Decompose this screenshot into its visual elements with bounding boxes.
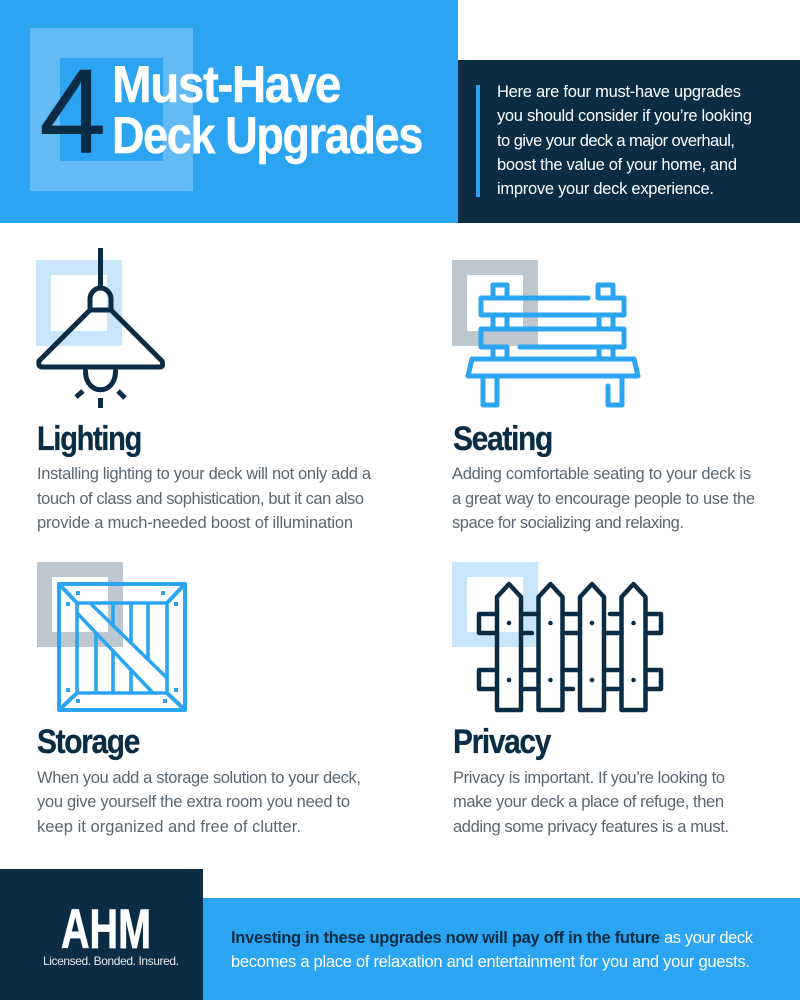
panel: conclusion xyxy=(203,898,800,1000)
intro text: Here are four must-have upgrades xyxy=(497,83,741,101)
conclusion text xyxy=(231,929,754,971)
panel: privacy xyxy=(452,562,729,836)
panel: introduction xyxy=(458,60,800,223)
conclusion text: becomes a place of relaxation and entertainment for you and your guests. xyxy=(231,953,750,971)
intro text: you should consider if you’re looking xyxy=(497,107,752,125)
panel: logo xyxy=(0,869,203,1000)
text: privacy description: Privacy is important. If you’re looking to xyxy=(453,769,725,787)
intro text: to give your deck a major overhaul, xyxy=(497,132,735,150)
panel: storage xyxy=(37,562,361,836)
text: lighting description: provide a much-needed boost of illumination xyxy=(37,514,353,532)
logo tagline: Licensed. Bonded. Insured. xyxy=(43,954,179,968)
text: lighting description xyxy=(37,465,372,532)
title: Deck Upgrades xyxy=(112,107,422,165)
title: Must-Have xyxy=(112,56,341,114)
text: privacy description: adding some privacy features is a must. xyxy=(453,818,729,836)
conclusion text: as your deck xyxy=(664,929,754,947)
heading: privacy: Privacy xyxy=(453,723,551,761)
title xyxy=(112,56,422,165)
text: privacy description xyxy=(453,769,729,836)
heading: storage: Storage xyxy=(37,723,140,761)
text: lighting description: Installing lighting to your deck will not only add a xyxy=(37,465,372,483)
heading: seating: Seating xyxy=(453,420,552,458)
text: privacy description: make your deck a place of refuge, then xyxy=(453,793,724,811)
intro text: boost the value of your home, and xyxy=(497,156,737,174)
text: storage description: keep it organized and free of clutter. xyxy=(37,818,301,836)
panel: seating xyxy=(452,260,755,532)
intro text: improve your deck experience. xyxy=(497,180,714,198)
text: storage description: you give yourself the extra room you need to xyxy=(37,793,350,811)
icon: hanging lamp xyxy=(36,248,163,408)
text: lighting description: touch of class and sophistication, but it can also xyxy=(37,490,364,508)
title numeral 4: 4 xyxy=(39,43,106,179)
text: seating description xyxy=(452,465,755,532)
icon: picket fence xyxy=(452,562,661,710)
icon: crate xyxy=(37,562,185,710)
panel: lighting xyxy=(36,248,372,532)
text: seating description: a great way to encourage people to use the xyxy=(452,490,755,508)
icon: bench xyxy=(452,260,638,405)
text: seating description: space for socializing and relaxing. xyxy=(452,514,684,532)
intro text xyxy=(497,83,752,198)
conclusion text: Investing in these upgrades now will pay off in the future xyxy=(231,929,660,947)
text: storage description xyxy=(37,769,361,836)
text: seating description: Adding comfortable seating to your deck is xyxy=(452,465,751,483)
text: storage description: When you add a storage solution to your deck, xyxy=(37,769,361,787)
heading: lighting: Lighting xyxy=(37,420,141,458)
logo wordmark: AHM xyxy=(61,897,151,960)
panel: title banner xyxy=(0,0,458,223)
